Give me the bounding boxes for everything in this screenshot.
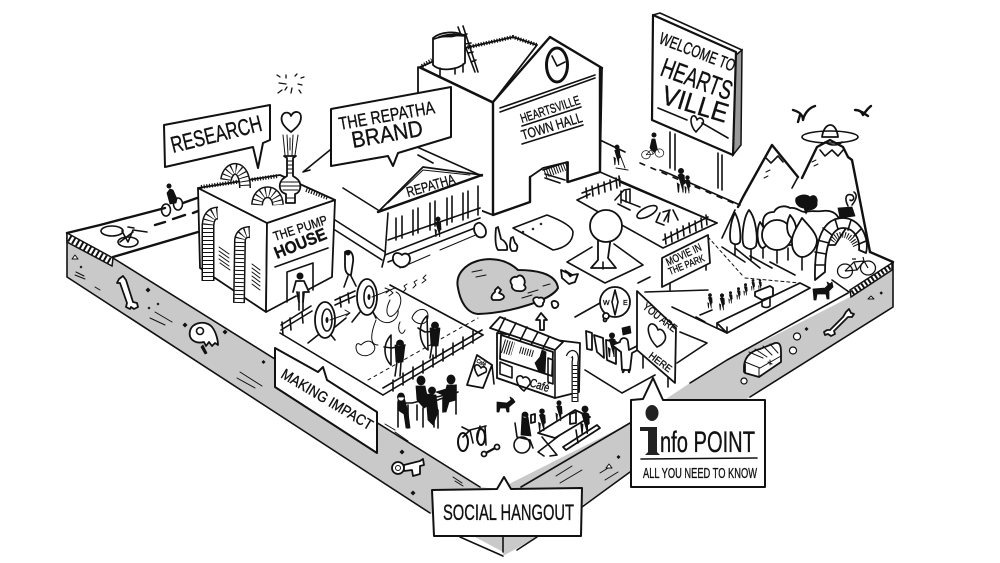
text: here: HERE [646,351,674,375]
person centre [416,376,429,408]
audience [708,279,761,310]
icon: bone right [824,309,854,336]
callout: research [164,105,270,168]
icon: treasure chest [744,343,781,377]
bike and scooter [458,426,500,456]
compass thought bubble: E [623,300,628,307]
callout: the repatha brand [331,87,451,166]
icon: key [392,459,424,476]
projector [755,286,773,308]
sports field [577,176,717,248]
heart right [474,223,486,237]
icon: parked bike on road left [101,226,147,247]
bushes behind trees [763,206,850,245]
hatched slab edge left [67,233,113,266]
tube left wall [208,213,218,281]
heading: THE PUMP: THE PUMP [271,212,329,244]
callout: making impact [275,348,377,453]
text: welcome to: WELCOME TO [657,29,738,75]
archer 2 [418,316,440,358]
walkers [678,168,690,193]
icon: skull [190,323,218,354]
icon: clock [546,48,568,82]
people at table [539,408,545,431]
stone arch tunnel [815,218,867,280]
person on steps [435,217,441,237]
window [500,335,553,376]
archer 1 [384,335,405,376]
cafe kiosk [490,313,580,402]
sparks above chimney [277,74,304,93]
info point plot [575,303,707,393]
tube roof front [257,192,278,205]
callout: making impact: MAKING IMPACT [278,366,376,434]
callout: the repatha brand: BRAND [349,115,425,153]
sand patch [513,215,573,250]
forest of trees [722,210,817,275]
geese [495,227,517,251]
person centre front [426,387,438,425]
callout: social hangout: SOCIAL HANGOUT [443,500,574,525]
movie in the park area [638,237,810,333]
picnic group with wheelchair [514,400,600,456]
chimney arrow [536,313,547,330]
cyclist back road [642,132,664,159]
fountain [511,275,526,291]
callout connector [303,150,330,172]
text: the park: THE PARK [667,253,707,278]
chimney with heart [280,112,301,203]
tree with plot [567,210,643,283]
movie sign [662,235,710,290]
black goat [838,192,856,218]
door with person [287,263,313,310]
text: cafe on a-board: Café [475,358,487,369]
heading: Repatha: REPATHA [404,171,457,200]
building: heartsville town hall [418,26,602,215]
tube roof back [226,169,245,188]
black sheep [796,195,817,214]
ufo [802,125,858,145]
text: hearts: HEARTS [657,52,737,106]
callout: info point [631,378,765,487]
icon: heart on billboard [691,116,703,132]
cafe tables with people [398,375,458,428]
you are here sign [637,291,679,387]
columns [385,186,480,268]
text: cafe: Café [528,376,552,395]
icon: heart on sign [648,324,665,347]
ground: outer edges of the plot [67,140,893,292]
person by target field [344,250,356,287]
compass thought bubble: W [603,300,610,307]
callout: research: RESEARCH [168,110,264,158]
black dog by the slab corner [813,282,833,300]
people on back road [614,132,690,193]
wheelchair [514,412,533,453]
cafe a-board [467,355,494,388]
billboard: welcome to heartsville [652,13,742,190]
birds [793,106,871,122]
pond [457,259,558,314]
soil layer: right side of the slab [503,262,893,556]
hatched slab edge right [850,263,892,297]
display panels [586,331,616,364]
water tower [433,26,478,76]
picnic table [538,410,600,456]
pipe [569,353,575,402]
soil layer: left side of the slab [67,233,505,556]
building: repatha bank [335,145,486,268]
two people at info sign [608,326,648,372]
person right [436,375,456,412]
decorative pebbles [741,333,801,384]
icon: cyclist on road [162,184,182,216]
ducks on shore right of pond [561,270,578,284]
archery field [280,275,483,395]
icon: info i [640,405,660,455]
wheelchair user [614,145,628,170]
archery target 1 [308,302,350,343]
text: you are: YOU ARE [640,301,679,335]
tube centre wall [239,232,250,303]
heading: HEARTSVILLE: HEARTSVILLE [518,92,582,126]
mountains [738,140,870,252]
dog silhouette [497,397,515,412]
duck [492,287,504,300]
compass thought bubble [600,287,630,322]
heart left [393,253,410,267]
heart on kiosk [517,376,530,391]
heading: HOUSE: HOUSE [271,224,329,263]
thought bubbles near cafe [533,297,558,308]
seated person left [398,393,410,428]
icon: bone left [117,276,138,309]
text: ville: VILLE [658,80,732,129]
callout: the repatha brand: THE REPATHA [337,97,436,134]
heading: TOWN HALL: TOWN HALL [519,109,584,143]
archery target 2 [352,279,390,322]
callout: social hangout [432,477,582,552]
text: all you need to know: ALL YOU NEED TO KNOW [643,465,758,482]
text: movie in: MOVIE IN [664,242,704,269]
icon: parked bike right [838,257,876,278]
building: the pump house [198,112,335,312]
text: nfo point: nfo POINT [660,426,755,459]
